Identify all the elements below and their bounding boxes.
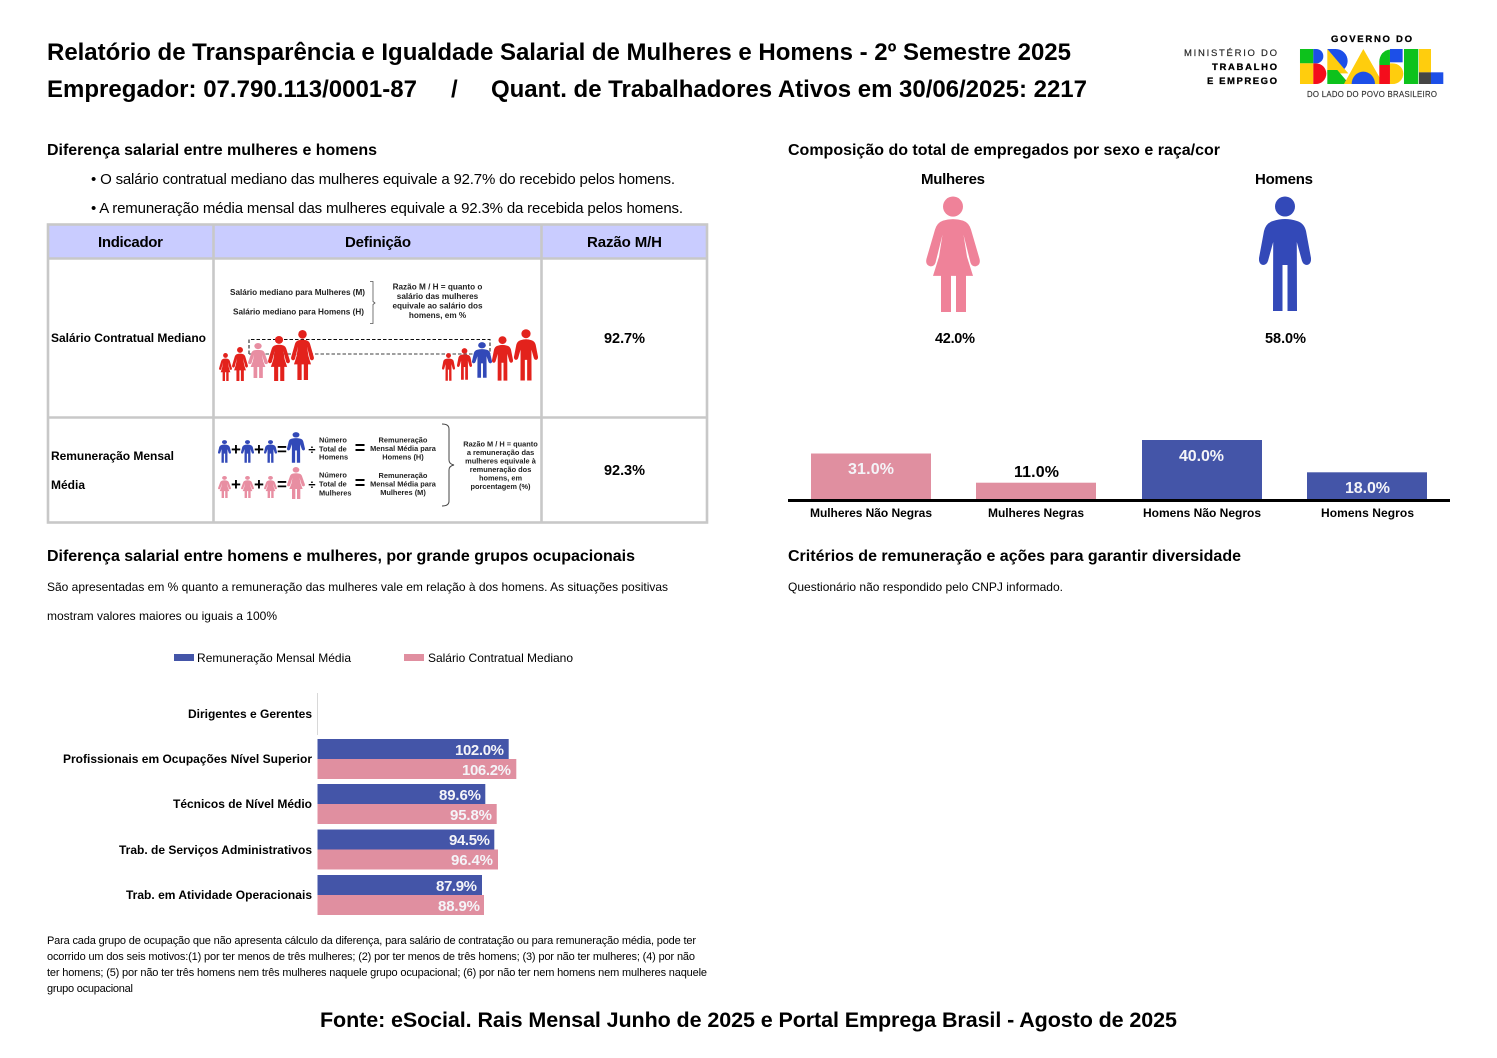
text block: explicação: São apresentadas em % quanto a remuneração das mulheres vale em relação à dos homens. As situações positivas [47, 580, 668, 594]
diagram: remuneração média: + [254, 440, 264, 459]
diagram: remuneração média: Mensal Média para [370, 480, 437, 488]
diagram: salário mediano: Razão M / H = quanto o [393, 282, 482, 292]
row: salário contratual mediano: 92.7% [604, 331, 645, 347]
diagram: remuneração média: + [254, 475, 264, 494]
diagram: remuneração média: porcentagem (%) [471, 482, 531, 491]
text block: bullets [91, 171, 683, 217]
title: Empregador: 07.790.113/0001-87 [47, 76, 417, 103]
diagram: remuneração média: a remuneração das [467, 448, 534, 457]
bar chart: composição por raça/cor: 31.0% [848, 461, 894, 478]
logo: Ministério do Trabalho e Emprego [1184, 48, 1277, 87]
bar chart: grupos ocupacionais: 88.9% [438, 898, 480, 915]
diagram: remuneração média: Total de [319, 444, 347, 454]
diagram: remuneração média: ÷ [308, 477, 316, 492]
bar chart: grupos ocupacionais: 106.2% [462, 762, 511, 779]
text block: bullets: • O salário contratual mediano das mulheres equivale a 92.7% do recebido pelos homens. [91, 171, 675, 188]
title: Relatório de Transparência e Igualdade Salarial de Mulheres e Homens - 2º Semestre 2025 [47, 39, 1071, 66]
bar chart: composição por raça/cor: Mulheres Não Negras [810, 506, 932, 520]
legend: Remuneração Mensal Média [197, 651, 351, 665]
diagram: salário mediano [219, 282, 538, 381]
row: salário contratual mediano [51, 331, 645, 347]
bar chart: grupos ocupacionais: Técnicos de Nível Médio [173, 797, 312, 811]
diagram: salário mediano: salário das mulheres [397, 292, 479, 301]
source line: Fonte: eSocial. Rais Mensal Junho de 2025 e Portal Emprega Brasil - Agosto de 2025 [320, 1008, 1177, 1032]
row: salário contratual mediano: Salário Contratual Mediano [51, 331, 206, 345]
logo: Ministério do Trabalho e Emprego: MINISTÉRIO DO [1184, 48, 1277, 59]
diagram: remuneração média: = [355, 473, 365, 493]
diagram: remuneração média: Total de [319, 480, 347, 488]
bar chart: grupos ocupacionais: 102.0% [455, 742, 504, 759]
row: remuneração mensal média: Remuneração Mensal [51, 449, 174, 463]
table header: Razão M/H [587, 234, 662, 251]
diagram: remuneração média: Remuneração [379, 436, 428, 444]
panel: mulheres [921, 171, 985, 347]
diagram: remuneração média: + [231, 475, 241, 494]
diagram: remuneração média: Mulheres (M) [380, 488, 426, 497]
diagram: salário mediano: homens, em % [409, 311, 467, 320]
bar chart: composição por raça/cor: 18.0% [1345, 480, 1390, 497]
diagram: remuneração média: mulheres equivale à [465, 456, 537, 466]
bar chart: grupos ocupacionais: Trab. em Atividade Operacionais [126, 888, 312, 902]
logo: Governo do Brasil: GOVERNO DO [1331, 34, 1412, 45]
footnote [47, 935, 707, 995]
text block: bullets: • A remuneração média mensal das mulheres equivale a 92.3% da recebida pelos homens. [91, 200, 683, 217]
panel: homens [1255, 171, 1313, 347]
text block: questionário: Questionário não respondido pelo CNPJ informado. [788, 580, 1063, 594]
diagram: salário mediano: Salário mediano para Homens (H) [233, 308, 364, 316]
bar chart: composição por raça/cor: Homens Negros [1321, 506, 1414, 520]
diagram: remuneração média: Mensal Média para [370, 444, 437, 453]
bar chart: composição por raça/cor: 11.0% [1014, 464, 1059, 481]
diagram: remuneração média: Número [319, 470, 347, 480]
diagram: remuneração média: Número [319, 436, 347, 444]
bar chart: composição por raça/cor: 40.0% [1179, 448, 1224, 465]
table header [98, 234, 662, 251]
diagram: remuneração média: remuneração dos [470, 465, 531, 474]
bar chart: grupos ocupacionais: 87.9% [436, 878, 477, 895]
bar chart: composição por raça/cor: Homens Não Negros [1143, 506, 1261, 520]
row: remuneração mensal média: 92.3% [604, 463, 645, 479]
diagram: remuneração média: ÷ [308, 442, 316, 457]
heading: critérios: Critérios de remuneração e ações para garantir diversidade [788, 548, 1241, 565]
row: remuneração mensal média [51, 449, 645, 492]
panel: homens: Homens [1255, 171, 1313, 188]
footnote: grupo ocupacional [47, 983, 133, 995]
logo: Governo do Brasil [1300, 34, 1443, 99]
footnote: ter homens; (5) por não ter três homens nem três mulheres naquele grupo ocupacional; (6) por não ter nem homens nem mulheres naquele [47, 967, 707, 979]
legend [174, 651, 573, 665]
diagram: salário mediano: equivale ao salário dos [392, 302, 483, 310]
bar chart: grupos ocupacionais: Trab. de Serviços Administrativos [119, 843, 312, 857]
footnote: ocorrido um dos seis motivos:(1) por ter menos de três mulheres; (2) por ter menos de três homens; (3) por não ter mulheres; (4) por não [47, 951, 695, 963]
title: / [451, 76, 458, 103]
panel: table [48, 224, 707, 522]
bar chart: composição por raça/cor: Mulheres Negras [988, 506, 1084, 520]
table header: Indicador [98, 234, 163, 251]
diagram: remuneração média: Mulheres [319, 488, 351, 498]
legend: Salário Contratual Mediano [428, 651, 573, 665]
icon: man [1259, 196, 1311, 311]
logo: Ministério do Trabalho e Emprego: E EMPREGO [1207, 76, 1277, 87]
diagram: remuneração média: + [231, 440, 241, 459]
heading: grupos ocupacionais: Diferença salarial entre homens e mulheres, por grande grupos ocupacionais [47, 548, 635, 565]
footnote: Para cada grupo de ocupação que não apresenta cálculo da diferença, para salário de contratação ou para remuneração média, pode ter [47, 935, 696, 947]
panel: mulheres: Mulheres [921, 171, 985, 188]
bar chart: grupos ocupacionais: 96.4% [451, 852, 493, 869]
bar chart: composição por raça/cor [788, 440, 1450, 520]
title: Quant. de Trabalhadores Ativos em 30/06/2025: 2217 [491, 76, 1087, 103]
diagram: salário mediano: Salário mediano para Mulheres (M) [230, 288, 365, 297]
bar chart: grupos ocupacionais: Profissionais em Ocupações Nível Superior [63, 752, 312, 766]
logo: Ministério do Trabalho e Emprego: TRABALHO [1212, 62, 1277, 73]
diagram: remuneração média [218, 424, 538, 506]
bar chart: grupos ocupacionais: Dirigentes e Gerentes [188, 707, 312, 721]
diagram: remuneração média: = [355, 438, 365, 458]
heading: composição: Composição do total de empregados por sexo e raça/cor [788, 142, 1220, 159]
text block: explicação: mostram valores maiores ou iguais a 100% [47, 609, 277, 623]
bar chart: grupos ocupacionais: 95.8% [450, 807, 492, 824]
panel: homens: 58.0% [1265, 331, 1306, 347]
diagram: remuneração média: = [277, 475, 287, 494]
row: remuneração mensal média: Média [51, 478, 85, 492]
bar chart: grupos ocupacionais: 94.5% [449, 832, 490, 849]
heading: diferença salarial: Diferença salarial entre mulheres e homens [47, 142, 377, 159]
diagram: remuneração média: Homens (H) [382, 452, 424, 462]
logo: Governo do Brasil: DO LADO DO POVO BRASILEIRO [1307, 90, 1437, 99]
table header: Definição [345, 234, 411, 251]
title [47, 39, 1087, 103]
diagram: remuneração média: Razão M / H = quanto [463, 440, 538, 448]
bar chart: grupos ocupacionais: 89.6% [439, 787, 481, 804]
diagram: remuneração média: homens, em [479, 474, 522, 482]
diagram: remuneração média: Remuneração [379, 471, 428, 480]
panel: mulheres: 42.0% [935, 331, 975, 347]
text block: explicação [47, 580, 668, 623]
diagram: remuneração média: = [277, 440, 287, 459]
icon: woman [926, 196, 980, 312]
bar chart: grupos ocupacionais [63, 693, 516, 915]
diagram: remuneração média: Homens [319, 452, 348, 462]
